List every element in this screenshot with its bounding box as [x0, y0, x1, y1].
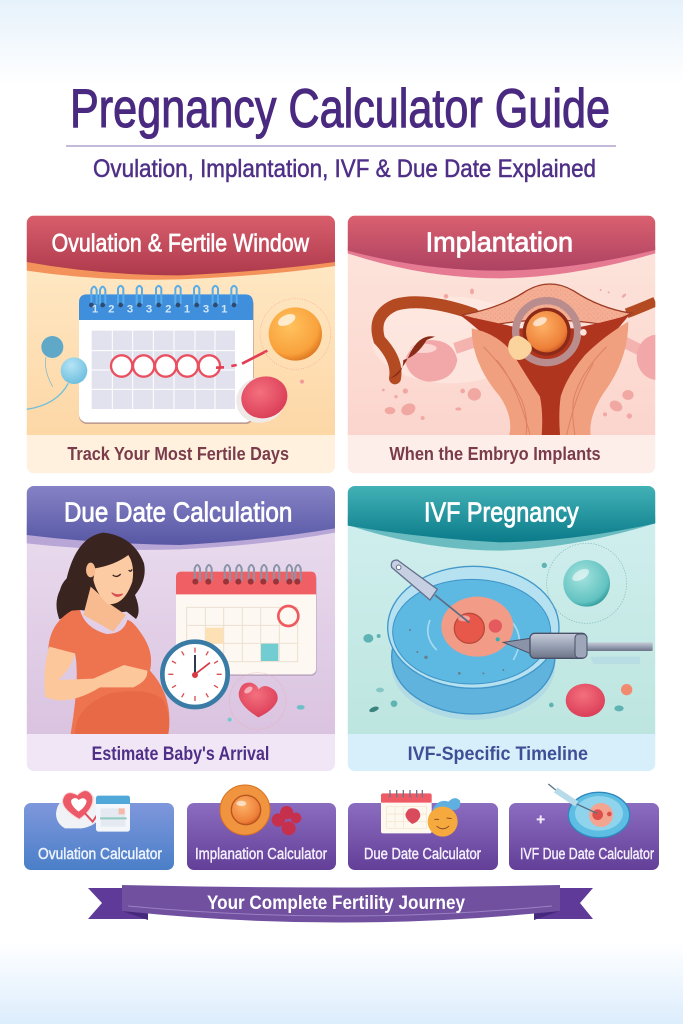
label: implantation calculator: Implanation Calculator: [195, 846, 327, 863]
label: due date calculator: Due Date Calculator: [364, 846, 481, 863]
heading: due date: Due Date Calculation: [64, 497, 292, 528]
illustration: fertile calendar: 3: [127, 304, 133, 316]
icon: orange egg: [260, 299, 331, 384]
illustration: pregnant woman: [44, 533, 169, 734]
calculator card: IVF due date: [509, 784, 659, 870]
illustration: fertile calendar: 2: [165, 304, 171, 316]
icon: heart and calendar: [56, 791, 130, 832]
icon: sperm cells: [27, 336, 87, 409]
heading: IVF: IVF Pregnancy: [424, 497, 579, 528]
icon: clock: [162, 642, 228, 707]
heading: ovulation: Ovulation & Fertile Window: [52, 231, 309, 258]
illustration: fertile calendar: 3: [203, 304, 209, 316]
caption: due date: Estimate Baby's Arrival: [92, 744, 269, 765]
heading: implantation: Implantation: [426, 227, 573, 258]
panel: due date calculation: [27, 486, 335, 771]
subtitle: Ovulation, Implantation, IVF & Due Date Explained: [93, 155, 596, 183]
illustration: fertile calendar: 3: [146, 304, 152, 316]
illustration: fertile calendar: 1: [184, 304, 190, 316]
panel: IVF pregnancy: [348, 486, 655, 771]
illustration: petri dish: [388, 566, 559, 720]
illustration: fertile calendar: 1: [92, 304, 98, 316]
icon: teal sphere: [547, 543, 627, 623]
label: IVF due date calculator: IVF Due Date Calculator: [520, 846, 654, 863]
panel: ovulation and fertile window: [27, 216, 335, 473]
icon: petri dish and syringe: [537, 784, 630, 838]
icon: right pipette: [496, 633, 653, 664]
icon: embryo and cells: [220, 785, 301, 835]
icon: red cell: [230, 370, 293, 430]
calculator card: due date: [348, 790, 498, 870]
illustration: uterus: [377, 284, 678, 435]
icon: red cells and specks: [363, 563, 632, 717]
icon: heart: [228, 673, 305, 729]
decorative cells: [382, 288, 634, 420]
header divider: [66, 146, 616, 147]
caption: implantation: When the Embryo Implants: [389, 443, 601, 464]
label: ovulation calculator: Ovulation Calculator: [38, 846, 162, 863]
icon: calendar and baby face: [381, 790, 460, 837]
ribbon banner: [88, 885, 593, 922]
illustration: fertile calendar: 1: [221, 304, 227, 316]
calculator card: implantation: [187, 785, 336, 870]
icon: left needle tool: [391, 560, 469, 623]
illustration: fertile calendar: [79, 286, 267, 424]
caption: IVF: IVF-Specific Timeline: [408, 744, 588, 765]
illustration: fertile calendar: 2: [108, 304, 114, 316]
caption: ovulation: Track Your Most Fertile Days: [67, 443, 289, 464]
calculator card: ovulation: [24, 791, 174, 870]
banner text: Your Complete Fertility Journey: [207, 893, 465, 914]
illustration: calendar: [176, 565, 317, 676]
panel: implantation: [348, 216, 678, 473]
